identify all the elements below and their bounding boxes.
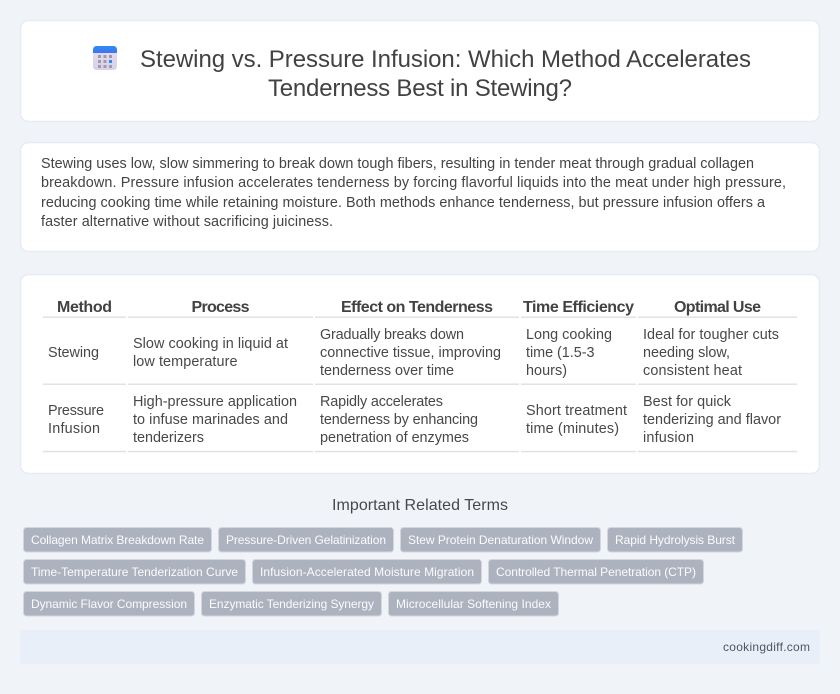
- table row: pressure infusion: [48, 394, 781, 446]
- table row: pressure infusion: High-pressure application: [133, 394, 297, 410]
- table header row: Process: [192, 299, 250, 316]
- tag: stew protein: Stew Protein Denaturation Window: [408, 533, 593, 547]
- tag: microcellular: [388, 592, 558, 616]
- table row: pressure infusion: penetration of enzymes: [320, 430, 469, 446]
- footer source: cookingdiff.com: [723, 640, 810, 654]
- tag: rapid hydrolysis: Rapid Hydrolysis Burst: [615, 533, 736, 547]
- table row: pressure infusion: tenderizing and flavor: [643, 412, 781, 428]
- table row: stewing: [48, 327, 779, 379]
- panel: comparison table: [20, 274, 820, 474]
- table row: pressure infusion: infusion: [643, 430, 694, 446]
- title: Stewing vs. Pressure Infusion: Which Method Accelerates: [140, 46, 751, 73]
- table row: stewing: low temperature: [133, 354, 238, 370]
- table row: pressure infusion: to infuse marinades and: [133, 412, 288, 428]
- table row: pressure infusion: Rapidly accelerates: [320, 394, 443, 410]
- table row: stewing: hours): [526, 363, 567, 379]
- tag: dynamic flavor: Dynamic Flavor Compression: [31, 597, 187, 611]
- table row: stewing: connective tissue, improving: [320, 345, 501, 361]
- table row: stewing: Slow cooking in liquid at: [133, 336, 288, 352]
- tag: controlled thermal: [488, 560, 704, 584]
- panel: title header: [20, 20, 820, 122]
- table row: stewing: Long cooking: [526, 327, 612, 343]
- tag: pressure-driven: [218, 528, 394, 552]
- table header row: Method: [57, 299, 112, 316]
- tag: enzymatic: [202, 592, 382, 616]
- table row: stewing: needing slow,: [643, 345, 730, 361]
- text block: summary: Stewing uses low, slow simmering to break down tough fibers, resulting in tender meat through gradual collagen: [41, 156, 754, 172]
- table header row: Effect on Tenderness: [341, 299, 493, 316]
- panel: related term tags: [24, 528, 742, 616]
- table row: pressure infusion: Infusion: [48, 421, 100, 437]
- text block: summary: reducing cooking time while retaining moisture. Both methods enhance tenderness, but pressure infusion offers a: [41, 195, 765, 211]
- tag: dynamic flavor: [24, 592, 194, 616]
- table header row: Time Efficiency: [523, 299, 634, 316]
- text block: summary: [41, 156, 786, 230]
- table row: stewing: Gradually breaks down: [320, 327, 464, 343]
- tag: stew protein: [400, 528, 600, 552]
- table row: stewing: tenderness over time: [320, 363, 454, 379]
- tag: collagen matrix: [24, 528, 212, 552]
- tag: microcellular: Microcellular Softening Index: [396, 597, 551, 611]
- tag: time-temperature: [24, 560, 246, 584]
- table row: stewing: time (1.5-3: [526, 345, 594, 361]
- table header row: Optimal Use: [674, 299, 761, 316]
- table header row: [57, 299, 761, 316]
- table row: stewing: Ideal for tougher cuts: [643, 327, 779, 343]
- tag: pressure-driven: Pressure-Driven Gelatinization: [226, 533, 386, 547]
- text block: summary: breakdown. Pressure infusion accelerates tenderness by forcing flavorful liquids into the meat under high pressure,: [41, 175, 786, 191]
- title: Tenderness Best in Stewing?: [268, 75, 572, 102]
- table row: stewing: consistent heat: [643, 363, 742, 379]
- text block: summary: faster alternative without sacrificing juiciness.: [41, 214, 333, 230]
- table row: pressure infusion: tenderizers: [133, 430, 204, 446]
- icon: calendar: [93, 46, 117, 70]
- heading: related terms: Important Related Terms: [332, 497, 508, 514]
- table row: pressure infusion: Pressure: [48, 403, 104, 419]
- tag: rapid hydrolysis: [608, 528, 742, 552]
- table row: pressure infusion: time (minutes): [526, 421, 619, 437]
- table row: pressure infusion: Short treatment: [526, 403, 627, 419]
- tag: controlled thermal: Controlled Thermal Penetration (CTP): [496, 565, 696, 579]
- table row: stewing: Stewing: [48, 345, 99, 361]
- tag: enzymatic: Enzymatic Tenderizing Synergy: [209, 597, 374, 611]
- tag: collagen matrix: Collagen Matrix Breakdown Rate: [31, 533, 204, 547]
- tag: infusion-accelerated: Infusion-Accelerated Moisture Migration: [260, 565, 474, 579]
- footer bar: [20, 630, 820, 664]
- tag: infusion-accelerated: [252, 560, 482, 584]
- tag: time-temperature: Time-Temperature Tenderization Curve: [31, 565, 238, 579]
- title: [140, 46, 751, 102]
- table row: pressure infusion: Best for quick: [643, 394, 732, 410]
- panel: summary text: [20, 142, 820, 252]
- table row: pressure infusion: tenderness by enhancing: [320, 412, 478, 428]
